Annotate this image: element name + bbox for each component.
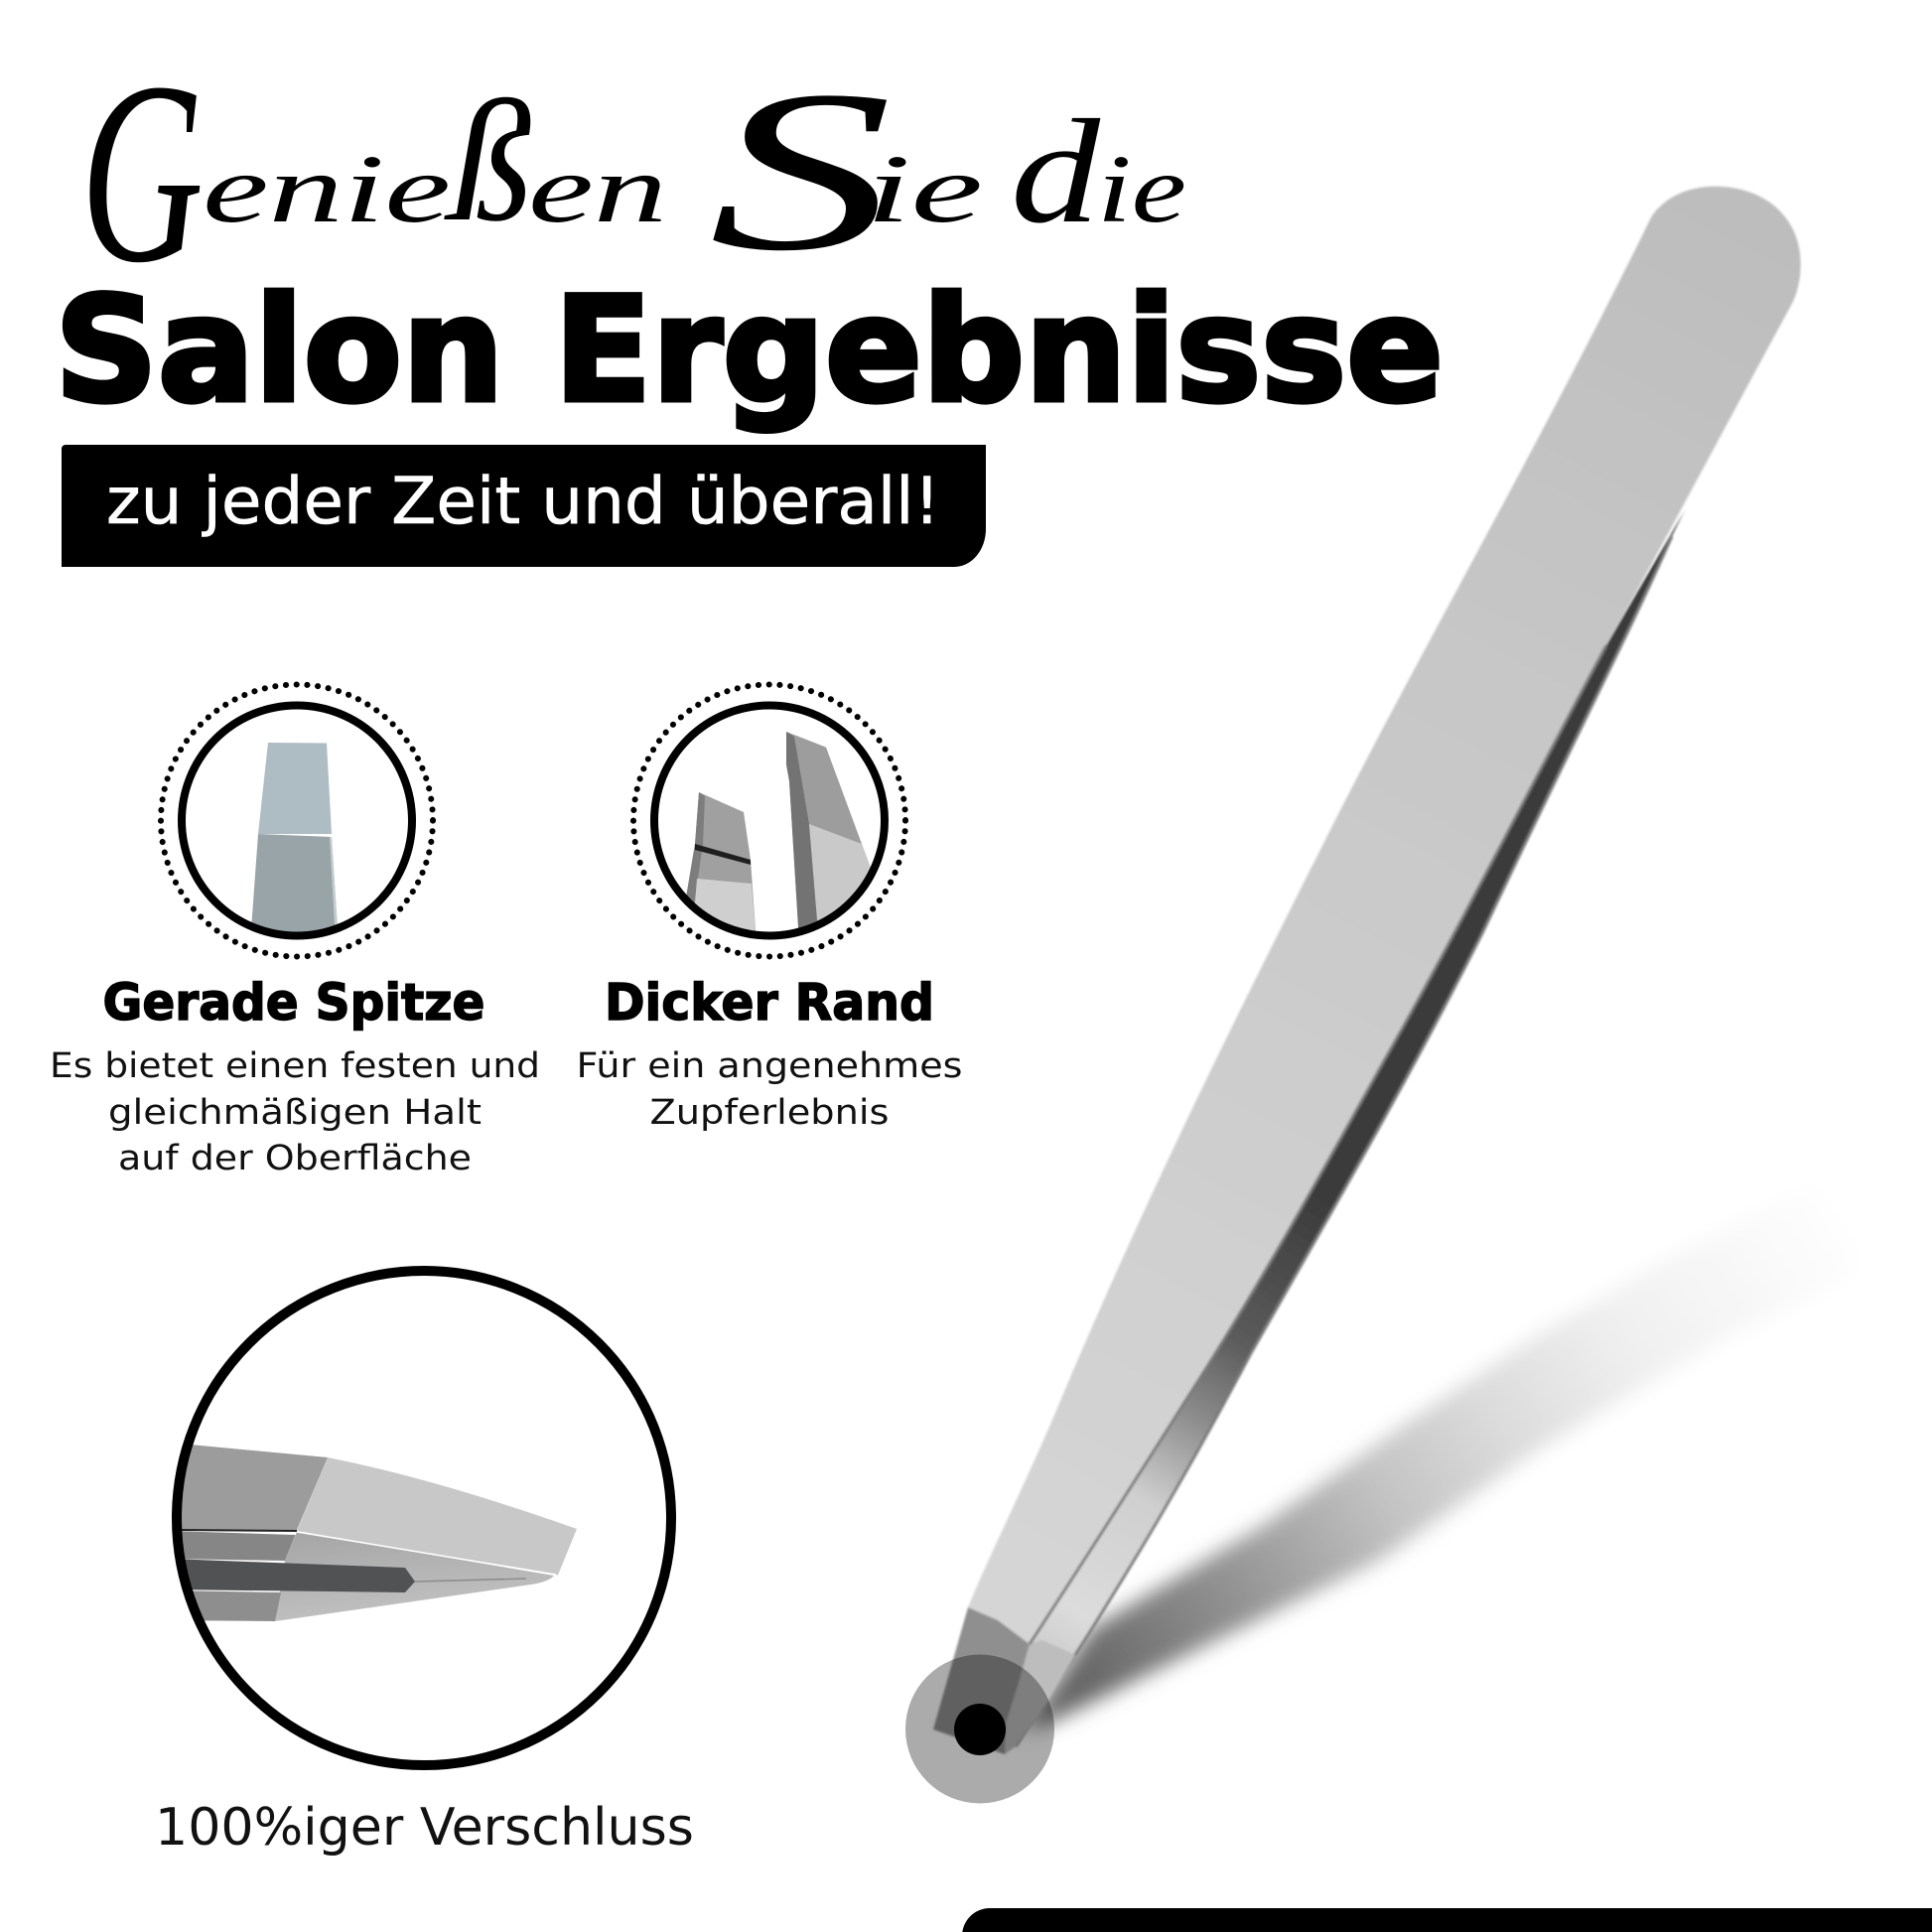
title: script line: S	[709, 44, 893, 299]
description: Gerade Spitze: gleichmäßigen Halt	[108, 1093, 482, 1133]
description: Gerade Spitze	[50, 1046, 540, 1178]
title: script line: enie	[203, 136, 451, 243]
black marker dot	[954, 1704, 1006, 1755]
panel: Dicker Rand	[576, 685, 963, 1133]
label: 100%iger Verschluss: 100%iger Verschluss	[155, 1798, 694, 1858]
panel: Gerade Spitze	[50, 685, 540, 1178]
title: script line: ie	[1097, 136, 1186, 243]
panel: 100% closure	[155, 1271, 694, 1858]
title: script line: ie	[866, 136, 983, 243]
label: Dicker Rand: Dicker Rand	[605, 974, 934, 1033]
lower arm outer edge	[1016, 536, 1672, 1746]
icon: straight tip close-up	[161, 685, 433, 957]
product: tweezers with shadow	[905, 187, 1864, 1804]
divider edge between arms	[1030, 645, 1606, 1644]
upper arm	[968, 187, 1801, 1644]
banner: zu jeder Zeit und überall	[62, 445, 986, 567]
title: script line: en	[528, 136, 667, 243]
title: script line: d	[1011, 89, 1101, 254]
description: Dicker Rand	[576, 1046, 963, 1133]
footer bar	[962, 1908, 1932, 1932]
description: Dicker Rand: Zupferlebnis	[649, 1093, 890, 1133]
lower arm	[993, 510, 1685, 1754]
label: Gerade Spitze: Gerade Spitze	[103, 974, 484, 1033]
heading: Salon Ergebnisse: Salon Ergebnisse	[55, 266, 1444, 435]
grey highlight ring	[905, 1654, 1054, 1803]
icon: thick edge close-up	[633, 685, 905, 957]
description: Dicker Rand: Für ein angenehmes	[576, 1046, 963, 1086]
banner: zu jeder Zeit und überall: zu jeder Zeit und überall!	[106, 465, 940, 539]
description: Gerade Spitze: Es bietet einen festen und	[50, 1046, 540, 1086]
title: script line: ß	[444, 65, 533, 257]
icon: closed tips close-up	[169, 1271, 671, 1765]
cast shadow	[1023, 1150, 1864, 1732]
title: script line: G	[80, 29, 204, 317]
tip band	[1005, 1640, 1075, 1754]
title: script line	[80, 29, 1186, 317]
description: Gerade Spitze: auf der Oberfläche	[118, 1139, 472, 1178]
tip facet	[933, 1607, 1030, 1754]
